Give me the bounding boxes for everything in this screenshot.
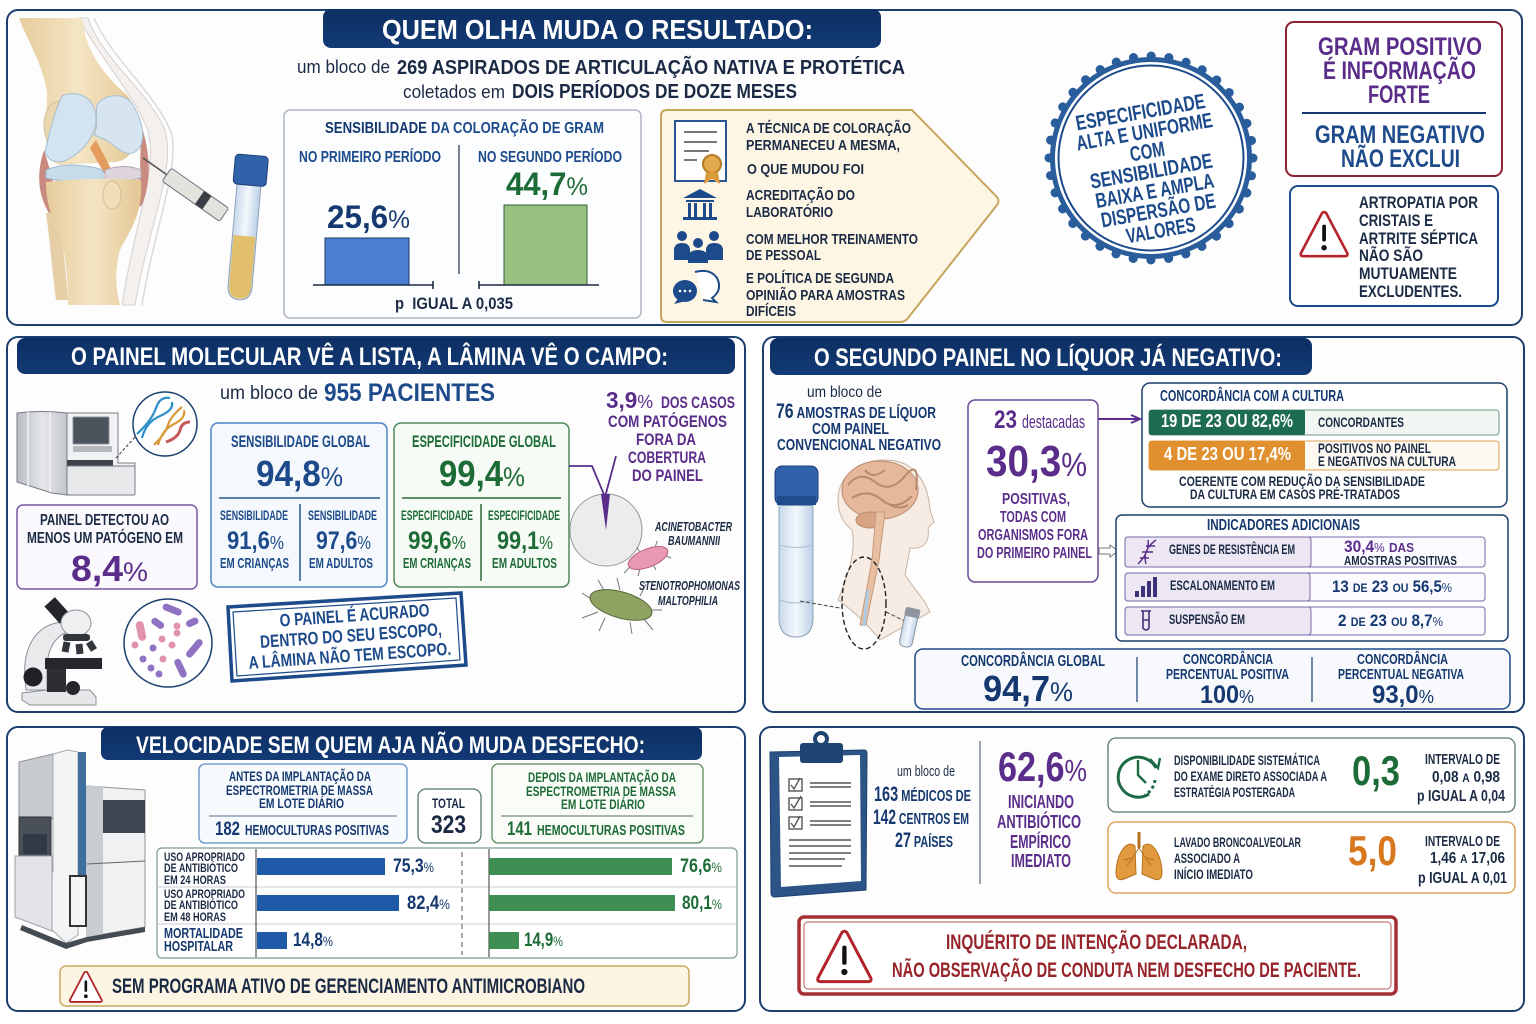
icon: Acinetobacter: BAUMANNII [668,533,720,548]
callout: artropatia por cristais: ARTRITE SÉPTICA [1359,229,1478,248]
subtitle: 955 pacientes: 955 PACIENTES [324,379,495,407]
subtitle: coletados em [403,82,505,102]
stamp: inquérito de intenção [799,917,1396,994]
stamp: especificidade alta [1049,56,1253,260]
card: exame direto: DO EXAME DIRETO ASSOCIADA A [1174,768,1327,784]
card: lavado broncoalveolar: 1,46 A 17,06 [1430,850,1505,867]
card: 23 destacadas: POSITIVAS, [1002,491,1070,508]
card: especificidade global: ESPECIFICIDADE [488,507,560,523]
bar chart: desfechos antes e depois: USO APROPRIADO [164,850,245,864]
stamp: especificidade alta: DISPERSÃO DE [1099,190,1217,232]
icon: Stenotrophomonas: STENOTROPHOMONAS [639,578,740,593]
card: painel detectou: 8,4% [71,548,148,589]
card: sensibilidade global: SENSIBILIDADE [308,507,377,523]
row: suspensão: 2 DE 23 OU 8,7% [1338,611,1443,630]
card: sensibilidade global: 94,8% [256,453,343,494]
card: lavado broncoalveolar: ASSOCIADO A [1174,850,1240,866]
card: concordâncias globais: 94,7% [983,668,1073,709]
stamp: especificidade alta: VALORES [1124,214,1197,248]
card: sensibilidade global: SENSIBILIDADE [220,507,288,523]
text: mudanças: E POLÍTICA DE SEGUNDA [746,270,894,287]
card: indicadores adicionais [1116,515,1508,641]
subtitle: 955 pacientes: um bloco de [220,383,318,404]
bar chart: sensibilidade da coloração de Gram: NO PRIMEIRO PERÍODO [299,147,441,166]
card: concordância com a cultura: DA CULTURA EM CASOS PRÉ-TRATADOS [1190,486,1400,502]
card: concordância com a cultura: 4 DE 23 OU 17,4% [1164,444,1291,464]
card: exame direto: 0,08 A 0,98 [1432,769,1500,786]
text: 163 médicos: um bloco de [897,763,955,780]
callout: Gram positivo / negativo: GRAM POSITIVO [1318,33,1482,61]
bar chart: desfechos antes e depois: DE ANTIBIÓTICO [164,897,238,912]
stat: 62,6%: IMEDIATO [1011,851,1071,871]
text: 3,9% dos casos: 3,9% [606,387,653,413]
text: 163 médicos [873,763,971,852]
card: antes: ESPECTROMETRIA DE MASSA [226,782,373,798]
card: especificidade global: EM CRIANÇAS [403,555,471,572]
stamp: especificidade alta: ESPECIFICIDADE [1074,90,1207,135]
callout: artropatia por cristais: MUTUAMENTE [1359,264,1457,283]
icon: test tube with aspirate [223,154,268,301]
subtitle [297,56,905,103]
bar chart: desfechos antes e depois: 76,6% [680,856,722,877]
text: 163 médicos: 27 PAÍSES [895,829,953,852]
text: mudanças: LABORATÓRIO [746,203,833,221]
text: mudanças: PERMANECEU A MESMA, [746,137,900,154]
arrow: para indicadores [1099,545,1118,557]
card: especificidade global: 99,1% [497,527,553,555]
icon: CSF tube [775,466,818,637]
card: especificidade global: 99,6% [408,527,466,555]
row: suspensão [1125,607,1485,635]
icon: head with brain and spine [800,460,934,649]
text: 3,9% dos casos: DO PAINEL [632,466,703,485]
card: sensibilidade global: EM ADULTOS [309,555,373,572]
panel: inquérito [760,727,1524,1011]
card: 23 destacadas: ORGANISMOS FORA [978,527,1088,544]
bar chart: sensibilidade da coloração de Gram [284,110,641,318]
panel: Gram stain block [7,9,1522,325]
icon: Acinetobacter: ACINETOBACTER [654,519,732,534]
callout: Gram positivo / negativo [1286,22,1502,176]
icon: DNA circle [116,392,197,458]
callout: artropatia por cristais: EXCLUDENTES. [1359,282,1462,301]
icon: mass spectrometer [15,750,145,949]
card: concordância com a cultura: 19 DE 23 OU 82,6% [1161,411,1293,431]
stamp: painel acurado [228,593,466,681]
title [323,9,881,48]
card: exame direto: DISPONIBILIDADE SISTEMÁTICA [1174,752,1320,768]
arrow: para concordância [1098,415,1140,423]
card: especificidade global: ESPECIFICIDADE [401,507,473,523]
bar chart: desfechos antes e depois: 75,3% [393,856,434,877]
text: mudanças: O QUE MUDOU FOI [747,161,864,178]
row: genes de resistência: AMOSTRAS POSITIVAS [1344,553,1457,568]
card: 23 destacadas: 30,3% [986,437,1087,486]
callout: artropatia por cristais: CRISTAIS E [1359,211,1433,230]
text: 76 amostras: 76 AMOSTRAS DE LÍQUOR [776,400,936,423]
card: sensibilidade global: 97,6% [316,527,371,555]
card: exame direto: p IGUAL A 0,04 [1417,788,1505,805]
subtitle: 269 ASPIRADOS DE ARTICULAÇÃO NATIVA E PROTÉTICA [397,56,905,79]
icon: Acinetobacter [624,519,732,576]
callout: Gram positivo / negativo: NÃO EXCLUI [1341,143,1460,173]
icon: syringe [138,151,229,221]
bar chart: desfechos antes e depois: 82,4% [407,893,450,914]
callout arrow: o que mudou [661,110,998,322]
stat: 62,6% [997,743,1087,871]
card: depois [492,764,703,843]
card: sensibilidade global: 91,6% [227,527,284,555]
callout: Gram positivo / negativo: É INFORMAÇÃO [1323,55,1476,85]
card: depois: ESPECTROMETRIA DE MASSA [526,783,676,799]
text: 163 médicos: 163 MÉDICOS DE [874,783,971,806]
bar chart: desfechos antes e depois: 14,9% [524,930,563,951]
icon: Stenotrophomonas: MALTOPHILIA [658,593,718,608]
card: total: 323 [431,811,466,839]
icon: molecular analyzer [17,412,135,495]
bar chart: sensibilidade da coloração de Gram: 25,6% [327,199,410,235]
card: concordância com a cultura: CONCORDANTES [1318,414,1404,430]
card: concordância com a cultura: CONCORDÂNCIA COM A CULTURA [1160,386,1344,405]
stamp: especificidade alta: COM [1128,138,1167,166]
stamp: inquérito de intenção: INQUÉRITO DE INTENÇÃO DECLARADA, [946,931,1247,954]
bar chart: sensibilidade da coloração de Gram: p IGUAL A 0,035 [395,294,513,313]
text: mudanças: A TÉCNICA DE COLORAÇÃO [746,119,911,137]
card: lavado broncoalveolar: INTERVALO DE [1425,833,1500,850]
card: concordâncias globais: PERCENTUAL NEGATIVA [1338,666,1464,683]
card: depois: HEMOCULTURAS POSITIVAS [537,822,685,839]
text: mudanças [746,119,918,320]
callout: artropatia por cristais [1290,186,1498,306]
card: 23 destacadas: 23 [994,406,1017,434]
card: antes: ANTES DA IMPLANTAÇÃO DA [229,767,371,784]
icon: warning [818,931,871,982]
card: depois: 141 [507,819,532,840]
card: concordâncias globais: CONCORDÂNCIA [1183,650,1273,668]
card: concordância com a cultura: COERENTE COM REDUÇÃO DA SENSIBILIDADE [1179,472,1425,489]
callout: artropatia por cristais: NÃO SÃO [1359,245,1423,265]
icon: people [674,231,723,263]
card: concordâncias globais: 100% [1200,681,1254,709]
card: indicadores adicionais: INDICADORES ADICIONAIS [1207,517,1360,534]
card: lavado broncoalveolar: 5,0 [1348,827,1397,874]
card: especificidade global [394,423,569,587]
card: painel detectou: PAINEL DETECTOU AO [40,512,169,529]
card: 23 destacadas: DO PRIMEIRO PAINEL [977,545,1092,562]
title [17,338,735,374]
bar chart: desfechos antes e depois: EM 48 HORAS [164,910,226,924]
text: 76 amostras: COM PAINEL [812,421,889,438]
icon: clipboard [770,733,867,897]
bar chart: sensibilidade da coloração de Gram: 44,7% [506,166,588,202]
card: total [418,789,481,843]
card: concordâncias globais: CONCORDÂNCIA [1357,650,1448,668]
row: escalonamento: ESCALONAMENTO EM [1170,577,1275,593]
card: 23 destacadas: TODAS COM [1000,509,1066,526]
card: especificidade global: 99,4% [439,453,525,494]
card: antes: 182 [215,819,240,840]
bar chart: desfechos antes e depois [157,848,737,958]
row: escalonamento [1125,573,1485,601]
card: concordância com a cultura: E NEGATIVOS NA CULTURA [1318,453,1456,469]
text: 76 amostras: CONVENCIONAL NEGATIVO [777,437,941,454]
card: lavado broncoalveolar: LAVADO BRONCOALVEOLAR [1174,834,1301,850]
stat: 62,6%: ANTIBIÓTICO [997,811,1081,832]
callout: Gram positivo / negativo: FORTE [1368,81,1430,109]
panel: velocidade [7,727,745,1011]
card: concordâncias globais: 93,0% [1372,681,1434,709]
bar chart: desfechos antes e depois: EM 24 HORAS [164,873,226,887]
card: concordâncias globais: CONCORDÂNCIA GLOBAL [961,651,1105,670]
title: O PAINEL MOLECULAR VÊ A LISTA, A LÂMINA VÊ O CAMPO: [71,341,668,371]
icon: certificate [675,121,726,184]
title: QUEM OLHA MUDA O RESULTADO: [382,14,813,45]
card: concordância com a cultura [1142,383,1507,507]
subtitle: 955 pacientes [220,379,495,407]
text: mudanças: OPINIÃO PARA AMOSTRAS [746,286,905,304]
card: exame direto: 0,3 [1352,747,1400,794]
bar chart: desfechos antes e depois: MORTALIDADE [164,925,243,942]
stamp: painel acurado: DENTRO DO SEU ESCOPO, [259,619,442,652]
icon: bank building [683,189,717,220]
card: concordância com a cultura: POSITIVOS NO PAINEL [1318,440,1431,456]
bar chart: sensibilidade da coloração de Gram: SENSIBILIDADE [325,120,427,137]
text: 76 amostras: um bloco de [807,384,882,401]
card: exame direto: ESTRATÉGIA POSTERGADA [1174,784,1295,800]
row: suspensão: SUSPENSÃO EM [1169,610,1245,627]
card: lavado broncoalveolar: p IGUAL A 0,01 [1418,870,1507,887]
card: lavado broncoalveolar: INÍCIO IMEDIATO [1174,866,1253,882]
subtitle: DOIS PERÍODOS DE DOZE MESES [512,80,797,103]
subtitle: um bloco de [297,57,390,77]
text: 76 amostras [776,384,941,454]
card: depois: EM LOTE DIÁRIO [561,796,645,812]
card: exame direto: INTERVALO DE [1425,751,1500,768]
title: O SEGUNDO PAINEL NO LÍQUOR JÁ NEGATIVO: [814,343,1282,372]
card: antes: EM LOTE DIÁRIO [259,795,344,811]
card: painel detectou: MENOS UM PATÓGENO EM [27,528,183,547]
text: 3,9% dos casos: DOS CASOS [661,393,735,412]
bar chart: desfechos antes e depois: 80,1% [682,893,722,914]
card: 23 destacadas [968,400,1098,582]
card: total: TOTAL [432,795,465,811]
text: 3,9% dos casos: COBERTURA [628,448,706,467]
bar chart: desfechos antes e depois: USO APROPRIADO [164,887,245,901]
card: sensibilidade global: SENSIBILIDADE GLOBAL [231,432,370,451]
card: antes: HEMOCULTURAS POSITIVAS [245,822,389,839]
card: concordâncias globais: PERCENTUAL POSITIVA [1166,666,1289,683]
text: 3,9% dos casos: FORA DA [636,430,696,449]
card: especificidade global: ESPECIFICIDADE GLOBAL [412,432,556,451]
icon: Stenotrophomonas [582,578,740,634]
title: VELOCIDADE SEM QUEM AJA NÃO MUDA DESFECHO: [136,731,645,759]
stamp: especificidade alta: ALTA E UNIFORME [1074,109,1214,156]
card: depois: DEPOIS DA IMPLANTAÇÃO DA [528,768,676,785]
card: antes [199,764,407,843]
icon: speech bubbles [673,271,719,304]
card: sensibilidade global [211,423,387,587]
text: mudanças: DIFÍCEIS [746,303,796,320]
icon: bacteria slide field [124,599,212,687]
bar chart: sensibilidade da coloração de Gram: NO SEGUNDO PERÍODO [478,147,622,166]
stamp: painel acurado: A LÂMINA NÃO TEM ESCOPO. [248,638,452,673]
icon: microscope [22,597,102,705]
stat: 62,6%: EMPÍRICO [1010,831,1071,852]
stat: 62,6%: INICIANDO [1008,792,1074,812]
row: genes de resistência: GENES DE RESISTÊNCIA EM [1169,540,1295,557]
title [770,338,1312,375]
callout: sem programa [60,966,689,1006]
panel: painel molecular [7,337,745,712]
row: genes de resistência [1125,537,1485,568]
card: concordâncias globais [915,649,1510,709]
text: 3,9% dos casos [606,387,735,485]
bar chart: sensibilidade da coloração de Gram: DA COLORAÇÃO DE GRAM [431,117,604,137]
row: escalonamento: 13 DE 23 OU 56,5% [1332,577,1452,596]
icon: warning [1301,212,1347,256]
icon: warning [70,972,102,1002]
text: mudanças: DE PESSOAL [746,247,821,264]
panel: segundo painel no líquor [763,337,1524,712]
text: 3,9% dos casos: COM PATÓGENOS [608,412,727,431]
card: 23 destacadas: destacadas [1022,412,1085,432]
icon: lungs [1116,832,1162,880]
text: 163 médicos: 142 CENTROS EM [873,806,969,829]
illustration: knee joint aspiration [19,18,268,305]
card: exame direto [1108,738,1515,812]
stat: 62,6%: 62,6% [998,743,1087,790]
text: mudanças: COM MELHOR TREINAMENTO [746,231,918,248]
card: painel detectou [17,505,197,589]
callout: Gram positivo / negativo: GRAM NEGATIVO [1315,121,1485,149]
stamp: especificidade alta: BAIXA E AMPLA [1094,170,1216,213]
card: sensibilidade global: EM CRIANÇAS [220,555,289,572]
bar chart: desfechos antes e depois: DE ANTIBIÓTICO [164,860,238,875]
bar chart: desfechos antes e depois: 14,8% [293,930,333,951]
callout: artropatia por cristais: ARTROPATIA POR [1359,193,1478,212]
bar chart: desfechos antes e depois: HOSPITALAR [164,938,233,955]
card: lavado broncoalveolar [1108,822,1515,893]
stamp: especificidade alta: SENSIBILIDADE [1088,150,1214,194]
stamp: painel acurado: O PAINEL É ACURADO [279,599,430,631]
card: especificidade global: EM ADULTOS [492,555,557,572]
callout: sem programa: SEM PROGRAMA ATIVO DE GERENCIAMENTO ANTIMICROBIANO [112,975,585,998]
chart: fatia fora da cobertura [569,456,642,566]
icon: clock [1118,757,1160,797]
text: mudanças: ACREDITAÇÃO DO [746,186,855,204]
row: genes de resistência: 30,4% DAS [1344,537,1414,556]
